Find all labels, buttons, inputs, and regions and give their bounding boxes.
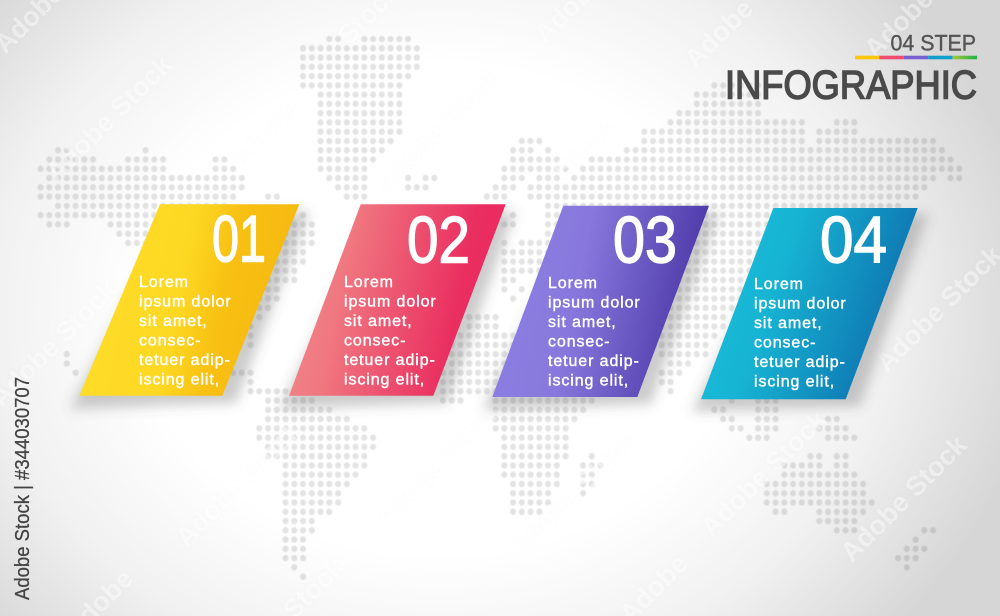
- watermarks: Adobe: [223, 93, 304, 174]
- panel: step 04: Lorem: [754, 276, 804, 293]
- panel: step 04: 04: [820, 202, 887, 276]
- panel: step 04: [692, 202, 928, 412]
- panel: step 02: consec-: [344, 332, 406, 350]
- panel: step 01: tetuer adip-: [139, 352, 231, 369]
- watermarks: Adobe Stock: [505, 424, 643, 563]
- watermarks: Adobe Stock: [40, 49, 178, 188]
- panel: step 04: consec-: [754, 334, 816, 352]
- panel: step 03: Lorem: [548, 275, 598, 292]
- panel: step 01: ipsum dolor: [139, 294, 232, 310]
- panel: step 04: ipsum dolor: [754, 296, 847, 312]
- panel: step 02: [280, 202, 515, 409]
- rainbow divider: [855, 56, 977, 59]
- panel: step 01: [70, 202, 309, 409]
- panel: step 01: iscing elit,: [139, 372, 220, 388]
- panel: step 02: 02: [407, 202, 470, 276]
- watermarks: Adobe Stock: [370, 394, 508, 533]
- panel: step 02: tetuer adip-: [344, 352, 436, 369]
- panel: step 03: sit amet,: [548, 314, 617, 331]
- panel: step 02: iscing elit,: [344, 372, 425, 388]
- watermarks: Stock: [547, 111, 621, 185]
- panel: step 02: Lorem: [344, 274, 394, 291]
- panel: step 02: sit amet,: [344, 313, 413, 330]
- panel: step 01: sit amet,: [139, 313, 208, 330]
- stock credit: Adobe Stock | #344030707: [12, 377, 34, 600]
- watermarks: Adobe Stock: [695, 404, 833, 543]
- heading: 04 step: 04 STEP: [890, 31, 976, 56]
- panel: step 04: sit amet,: [754, 315, 823, 332]
- panel: step 03: iscing elit,: [548, 372, 629, 390]
- panel: step 01: consec-: [139, 332, 201, 350]
- watermarks: Adobe Stock: [370, 59, 508, 198]
- panel: step 01: Lorem: [139, 274, 189, 291]
- panel: step 01: 01: [212, 202, 266, 276]
- panel: step 03: 03: [613, 202, 677, 276]
- panel: step 02: ipsum dolor: [344, 294, 437, 310]
- panel: step 03: [483, 202, 719, 410]
- panel: step 03: tetuer adip-: [548, 353, 640, 370]
- panel: step 03: consec-: [548, 334, 610, 350]
- heading: infographic: INFOGRAPHIC: [725, 63, 977, 107]
- watermarks: Adobe Stock: [835, 429, 973, 568]
- watermarks: Adobe Stock: [170, 414, 308, 553]
- panel: step 04: tetuer adip-: [754, 354, 846, 371]
- panel: step 04: iscing elit,: [754, 374, 835, 390]
- panel: step 03: ipsum dolor: [548, 294, 641, 312]
